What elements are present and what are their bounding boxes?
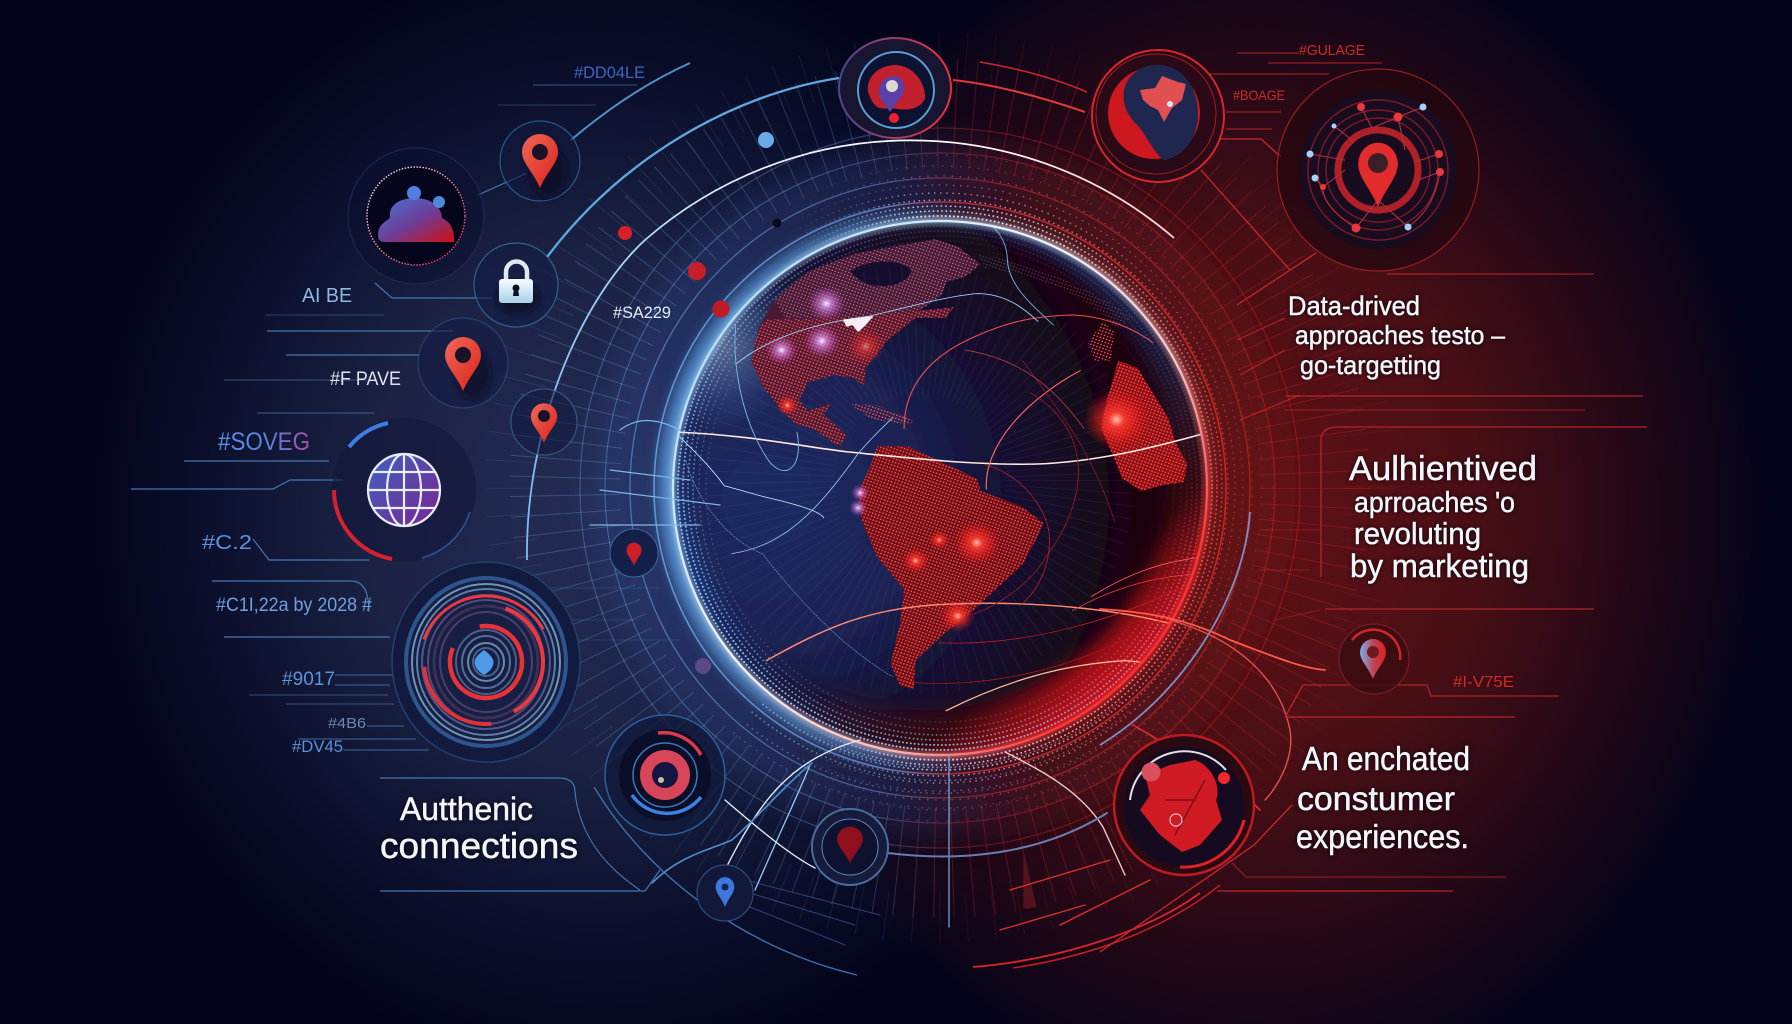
text block: revolutionising marketing	[1349, 450, 1537, 584]
icon: top location badge	[839, 38, 951, 138]
globe	[625, 204, 1241, 760]
Europe	[1088, 321, 1115, 361]
labels: left small tags: AI BE	[302, 285, 352, 307]
labels: left small tags: #SA229	[613, 303, 671, 322]
labels: left small tags: #SOVEG	[218, 428, 310, 456]
Caribbean	[849, 404, 916, 423]
North America	[751, 239, 981, 446]
icon: fingerprint rings	[392, 562, 580, 762]
orbital grid rings	[510, 58, 1370, 975]
icon: cloud badge	[348, 148, 484, 284]
text block: consumer experiences	[1296, 740, 1470, 855]
text block: data-driven approaches: go-targetting	[1300, 350, 1441, 380]
icon: map pin 1	[500, 121, 580, 201]
small node balls	[618, 132, 782, 674]
globe rim	[673, 221, 1207, 755]
text block: authentic connections: connections	[380, 825, 578, 866]
labels: left small tags: #C.2	[202, 532, 252, 554]
icon: small pin badge	[1339, 624, 1409, 694]
text block: consumer experiences: constumer	[1297, 780, 1455, 817]
text block: authentic connections	[380, 791, 578, 866]
South America	[858, 446, 1044, 689]
text block: data-driven approaches: Data-drived	[1288, 291, 1420, 321]
labels: left small tags: #DV45	[292, 737, 343, 756]
text block: revolutionising marketing: Aulhientived	[1349, 450, 1537, 488]
labels: left small tags: #DD04LE	[574, 63, 645, 82]
labels: right small tags: #BOAGE	[1233, 87, 1285, 103]
text block: data-driven approaches: approaches testo –	[1295, 320, 1506, 350]
labels: left small tags: #9017	[282, 669, 335, 690]
icon: earth badge	[1092, 50, 1224, 182]
icon: target badge	[605, 715, 725, 835]
icon: padlock	[474, 243, 558, 327]
text block: consumer experiences: experiences.	[1296, 818, 1469, 855]
icon: red machine badge	[1114, 735, 1254, 875]
text block: authentic connections: Autthenic	[400, 791, 533, 827]
labels: left small tags: #C1I,22a by 2028 #	[216, 595, 372, 616]
small airplane mark	[843, 316, 873, 332]
flight arcs	[679, 228, 1200, 712]
outer connector arcs over globe edge	[590, 421, 1325, 945]
city lights	[766, 286, 1149, 632]
icon: map pin 3	[511, 389, 577, 455]
text block: revolutionising marketing: aprroaches 'o	[1354, 487, 1515, 519]
labels: right small tags: #I-V75E	[1453, 674, 1514, 691]
labels: right small tags: #GULAGE	[1299, 42, 1365, 59]
icon: fingerprint centre drop	[474, 650, 494, 675]
text block: revolutionising marketing: by marketing	[1350, 548, 1529, 584]
text block: revolutionising marketing: revoluting	[1354, 516, 1481, 551]
icon: red drop badge	[812, 809, 888, 885]
right connector lines	[1100, 53, 1647, 952]
icon: wireframe globe	[332, 418, 476, 562]
labels: left small tags: #4B6	[328, 715, 366, 732]
labels: left small tags	[202, 63, 671, 756]
continents	[679, 228, 1200, 712]
icon: map pin 2	[418, 318, 508, 408]
left connector lines	[131, 85, 680, 891]
dotted halo around globe	[607, 155, 1273, 821]
icon: blue pin badge	[697, 865, 753, 921]
labels: left small tags: #F PAVE	[330, 369, 401, 390]
icon: network location badge	[1277, 69, 1479, 271]
Africa	[1101, 361, 1187, 491]
text block: data-driven approaches	[1288, 291, 1506, 380]
labels: right small tags	[1233, 42, 1514, 691]
polar stipple	[977, 254, 1134, 329]
text block: consumer experiences: An enchated	[1302, 740, 1470, 777]
icon: small red node	[610, 529, 658, 577]
